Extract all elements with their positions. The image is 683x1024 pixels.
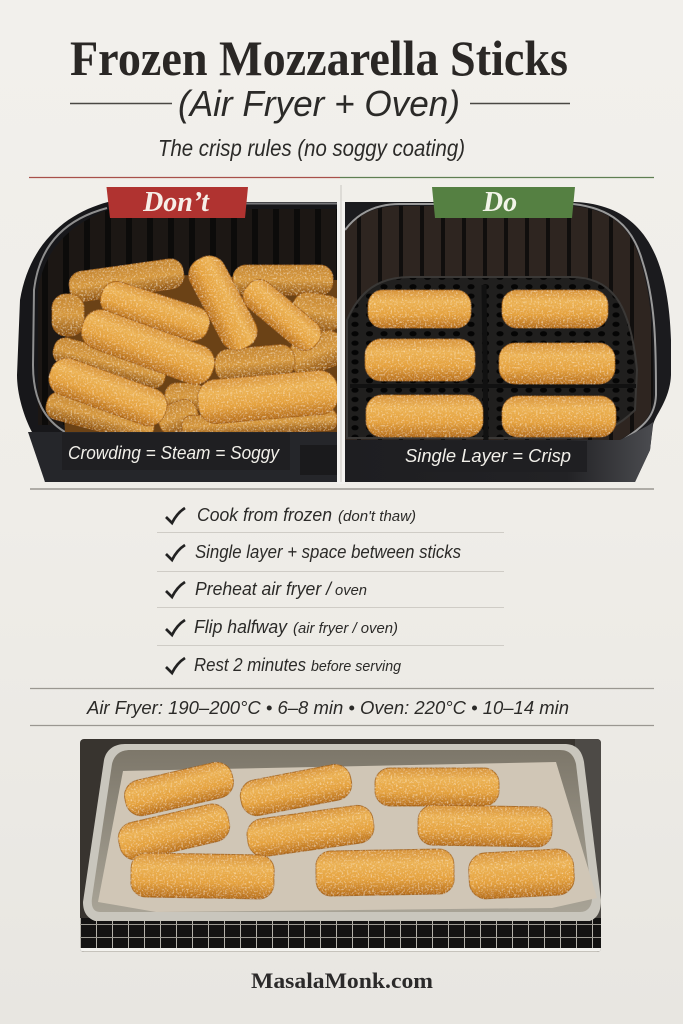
rule 4: Flip halfway <box>194 616 289 637</box>
badge: don't <box>106 187 248 218</box>
caption band: single layer: Single Layer = Crisp <box>405 445 571 466</box>
badge: do <box>432 187 575 218</box>
parchment paper <box>98 762 597 912</box>
photo: crowded air fryer basket <box>17 202 349 482</box>
panel: do <box>345 187 671 482</box>
caption band: single layer <box>385 441 587 472</box>
caption band: crowding: Crowding = Steam = Soggy <box>68 442 281 463</box>
shadowed gaps between sticks <box>60 275 337 432</box>
rule 4: (air fryer / oven) <box>293 621 398 637</box>
caption band: crowding <box>62 433 290 470</box>
crowded sticks <box>45 255 337 432</box>
photo: oven tray <box>80 739 601 952</box>
red and green divider <box>29 176 654 178</box>
rule 1: Cook from frozen <box>197 504 332 525</box>
cooking times strip: Air Fryer: 190–200°C • 6–8 min • Oven: 220°C • 10–14 min <box>86 698 569 718</box>
rule 5 <box>166 654 401 675</box>
nine baked sticks <box>115 759 575 900</box>
title: Frozen Mozzarella Sticks <box>70 30 568 86</box>
center divider <box>337 185 345 484</box>
badge: don't: Don’t <box>142 187 210 218</box>
photo: single layer air fryer basket <box>345 202 671 482</box>
six spaced sticks <box>365 290 616 437</box>
subtitle with side rules: (Air Fryer + Oven) <box>178 83 460 124</box>
rule 3: oven <box>335 582 367 599</box>
checklist <box>157 504 504 675</box>
metal sheet pan <box>83 744 601 921</box>
rule 1: (don't thaw) <box>338 509 416 525</box>
rule 5: before serving <box>311 659 401 675</box>
rule 5: Rest 2 minutes <box>194 654 306 675</box>
rule 4 <box>166 616 398 637</box>
badge: do: Do <box>482 187 517 218</box>
rule 1 <box>166 504 416 525</box>
website footer: MasalaMonk.com <box>251 968 433 993</box>
rule 2: Single layer + space between sticks <box>195 541 461 562</box>
rule 3: Preheat air fryer / <box>195 579 333 599</box>
wire basket floor <box>347 277 637 438</box>
tagline: The crisp rules (no soggy coating) <box>158 135 465 161</box>
panel: don't <box>17 187 349 482</box>
row dividers <box>157 532 504 646</box>
lower basket body <box>570 422 653 482</box>
rule 3 <box>166 579 367 599</box>
wire rack <box>80 918 601 952</box>
section rule above checklist <box>30 488 654 490</box>
